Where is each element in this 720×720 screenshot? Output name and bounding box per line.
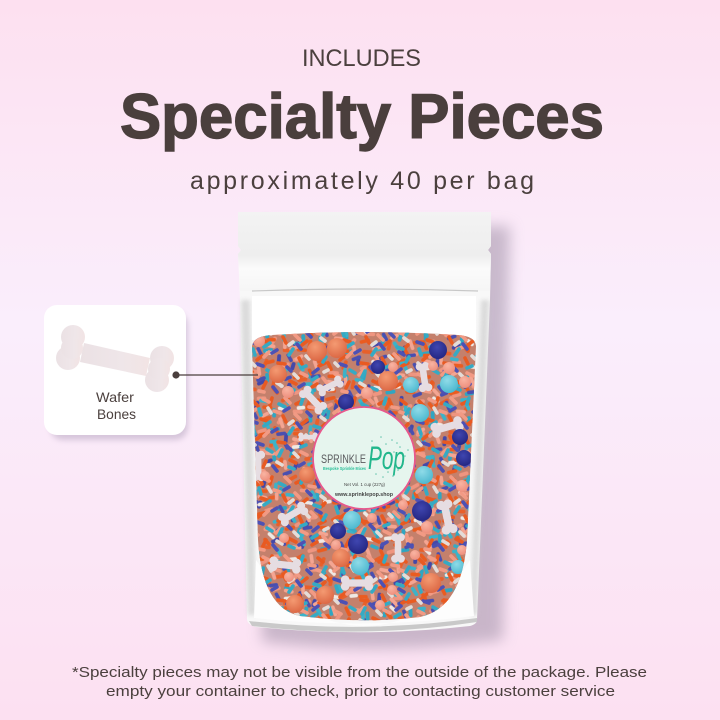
pop wordmark: Pop	[368, 440, 405, 476]
card label: Wafer	[96, 389, 134, 405]
card label: Bones	[97, 406, 136, 422]
footnote: empty your container to check, prior to contacting customer service	[106, 683, 615, 700]
wafer bones in bag	[251, 361, 465, 591]
candy pearls	[253, 335, 472, 613]
callout card: wafer bones	[44, 305, 188, 440]
subtitle: approximately 40 per bag	[190, 167, 534, 195]
sprinkles window	[252, 332, 476, 620]
icon: wafer bone	[56, 325, 174, 392]
footnote	[72, 664, 647, 700]
bag body	[238, 212, 491, 632]
net volume: Net Vol. 1 cup (227g)	[344, 482, 385, 487]
bag top seal	[238, 212, 491, 291]
tagline: Bespoke Sprinkle Mixes	[323, 466, 366, 472]
website: www.sprinklepop.shop	[334, 492, 393, 498]
sticker dots	[371, 436, 409, 478]
label: includes: INCLUDES	[302, 45, 421, 72]
card label	[96, 389, 136, 422]
brand sticker	[313, 407, 415, 509]
card shadow	[50, 312, 188, 440]
connector line	[172, 371, 258, 379]
bag shadow	[262, 226, 510, 649]
sprinkle wordmark: SPRINKLE	[321, 452, 366, 466]
bag side shading	[241, 300, 489, 615]
card	[44, 305, 186, 435]
title: Specialty Pieces	[120, 82, 604, 152]
product bag	[238, 212, 491, 632]
footnote: *Specialty pieces may not be visible from the outside of the package. Please	[72, 664, 647, 681]
